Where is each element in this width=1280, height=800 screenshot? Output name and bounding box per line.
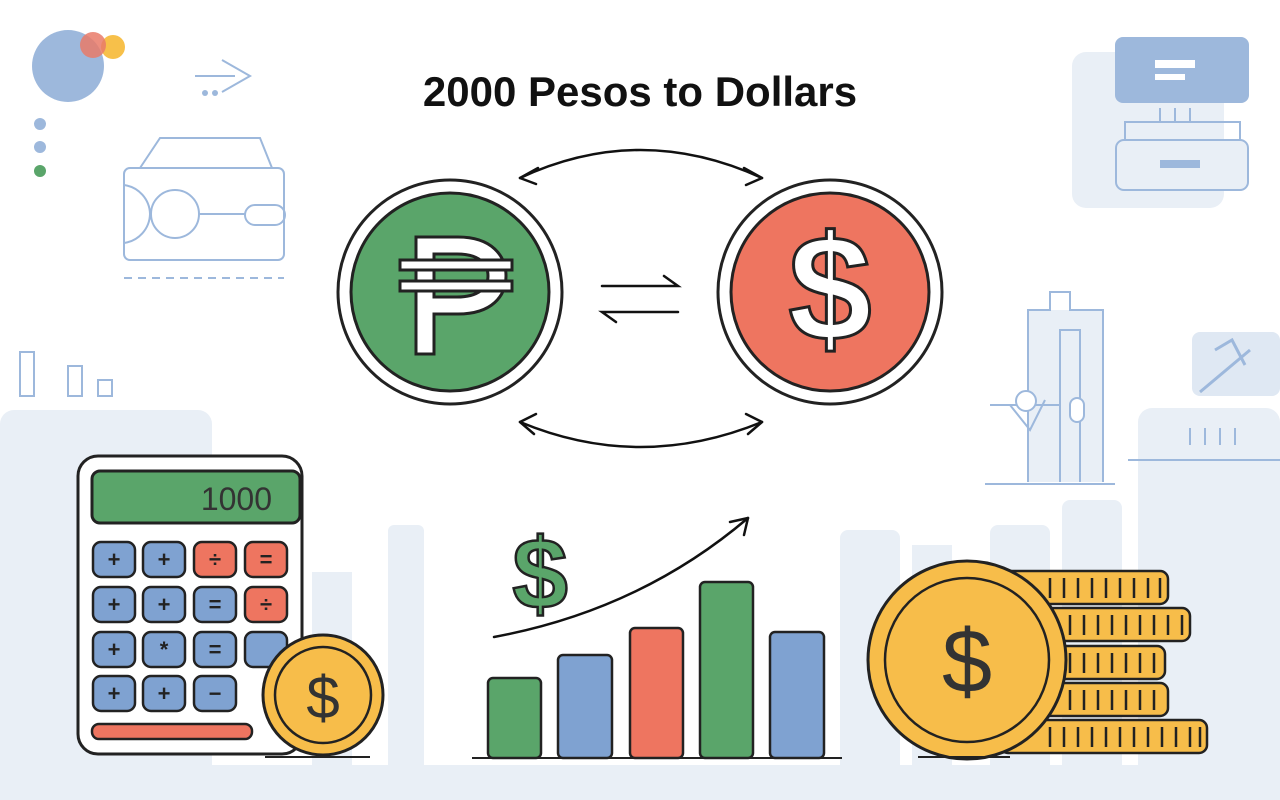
background panels (0, 408, 1280, 800)
icon: small gold coin (263, 635, 383, 757)
calculator buttons: + (108, 592, 120, 617)
calculator buttons: + (108, 681, 120, 706)
calculator buttons: ÷ (260, 592, 272, 617)
calculator buttons: ÷ (209, 547, 221, 572)
calculator display: 1000 (201, 481, 272, 517)
icon: peso coin (338, 180, 562, 404)
calculator buttons: + (158, 592, 170, 617)
calculator buttons: + (108, 637, 120, 662)
calculator buttons: = (209, 637, 221, 662)
icon: big gold coin (868, 561, 1066, 759)
title: 2000 Pesos to Dollars (423, 68, 857, 115)
decoration: top-left circles and wallet (20, 30, 285, 396)
decoration: right chart (985, 292, 1115, 484)
calculator buttons: * (160, 637, 169, 662)
calculator buttons (93, 542, 287, 711)
calculator buttons: = (209, 592, 221, 617)
calculator buttons: = (260, 547, 272, 572)
icon: green dollar: $ (512, 518, 568, 630)
bar chart (472, 582, 842, 758)
arrow: top arc (520, 150, 762, 185)
decoration: top-right device (1072, 37, 1280, 460)
arrow: growth curve (494, 518, 748, 637)
icon: dollar coin: $ (788, 204, 872, 372)
calculator (78, 456, 302, 754)
arrow: exchange middle (602, 276, 678, 322)
calculator buttons: − (209, 681, 221, 706)
icon: dollar coin (718, 180, 942, 404)
icon: small gold coin: $ (306, 664, 340, 731)
calculator buttons: + (158, 547, 170, 572)
arrow: bottom arc (520, 414, 762, 447)
calculator display (92, 471, 300, 523)
calculator buttons: + (158, 681, 170, 706)
coin stack (1000, 571, 1207, 753)
calculator buttons: + (108, 547, 120, 572)
calculator red bar (92, 724, 252, 739)
icon: big gold coin: $ (942, 612, 992, 712)
